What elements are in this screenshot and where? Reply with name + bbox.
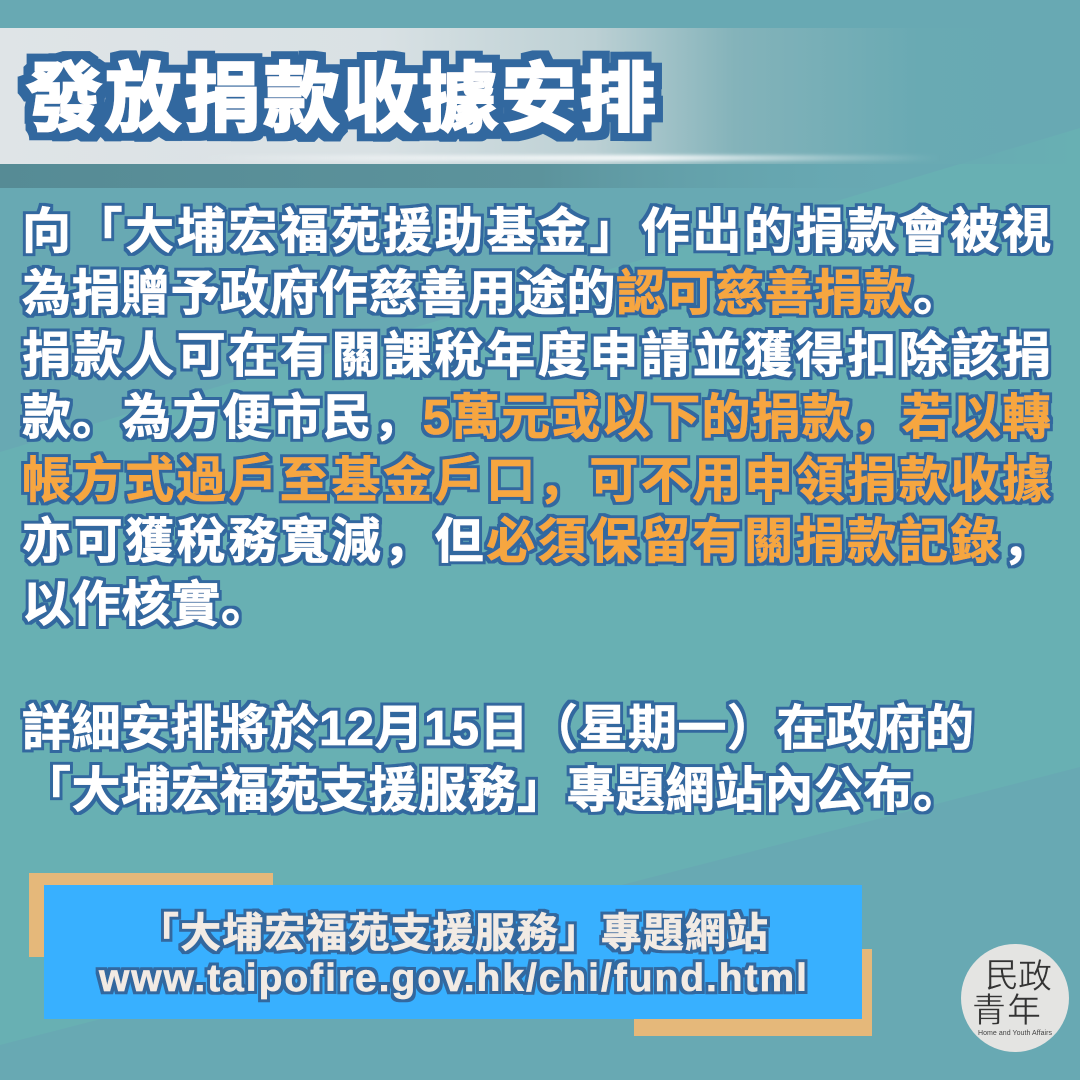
body text: announcement: 詳細安排將於12月15日（星期一）在政府的	[22, 702, 974, 756]
logo: 青	[972, 983, 1006, 1032]
body text: tax deduction paragraph	[22, 205, 1051, 632]
body text: tax deduction paragraph: 帳方式過戶至基金戶口，可不用申領捐款收據	[22, 454, 1051, 508]
website callout	[29, 873, 872, 1036]
body text: announcement	[22, 702, 974, 818]
logo: Home and Youth Affairs	[978, 1030, 1052, 1037]
website callout: 「大埔宏福苑支援服務」專題網站	[138, 910, 768, 956]
logo: 政	[1018, 949, 1052, 998]
body text: tax deduction paragraph: 捐款人可在有關課稅年度申請並獲得扣除該捐	[22, 329, 1051, 383]
logo: 年	[1007, 983, 1041, 1032]
title banner	[0, 28, 1080, 188]
website callout: www.taipofire.gov.hk/chi/fund.html	[98, 957, 807, 1000]
logo	[961, 944, 1069, 1052]
body text: tax deduction paragraph: 向「大埔宏福苑援助基金」作出的捐款會被視	[22, 205, 1051, 259]
logo: 民	[985, 948, 1019, 997]
body text: tax deduction paragraph: 款。為方便市民，5萬元或以下的捐款，若以轉	[22, 391, 1051, 445]
body text: tax deduction paragraph: 以作核實。	[22, 578, 270, 632]
body text: tax deduction paragraph: 亦可獲稅務寬減，但必須保留有關捐款記錄，	[22, 515, 1051, 569]
title: 發放捐款收據安排	[26, 37, 656, 147]
body text: announcement: 「大埔宏福苑支援服務」專題網站內公布。	[22, 764, 962, 818]
body text: tax deduction paragraph: 為捐贈予政府作慈善用途的認可慈善捐款。	[22, 267, 962, 321]
